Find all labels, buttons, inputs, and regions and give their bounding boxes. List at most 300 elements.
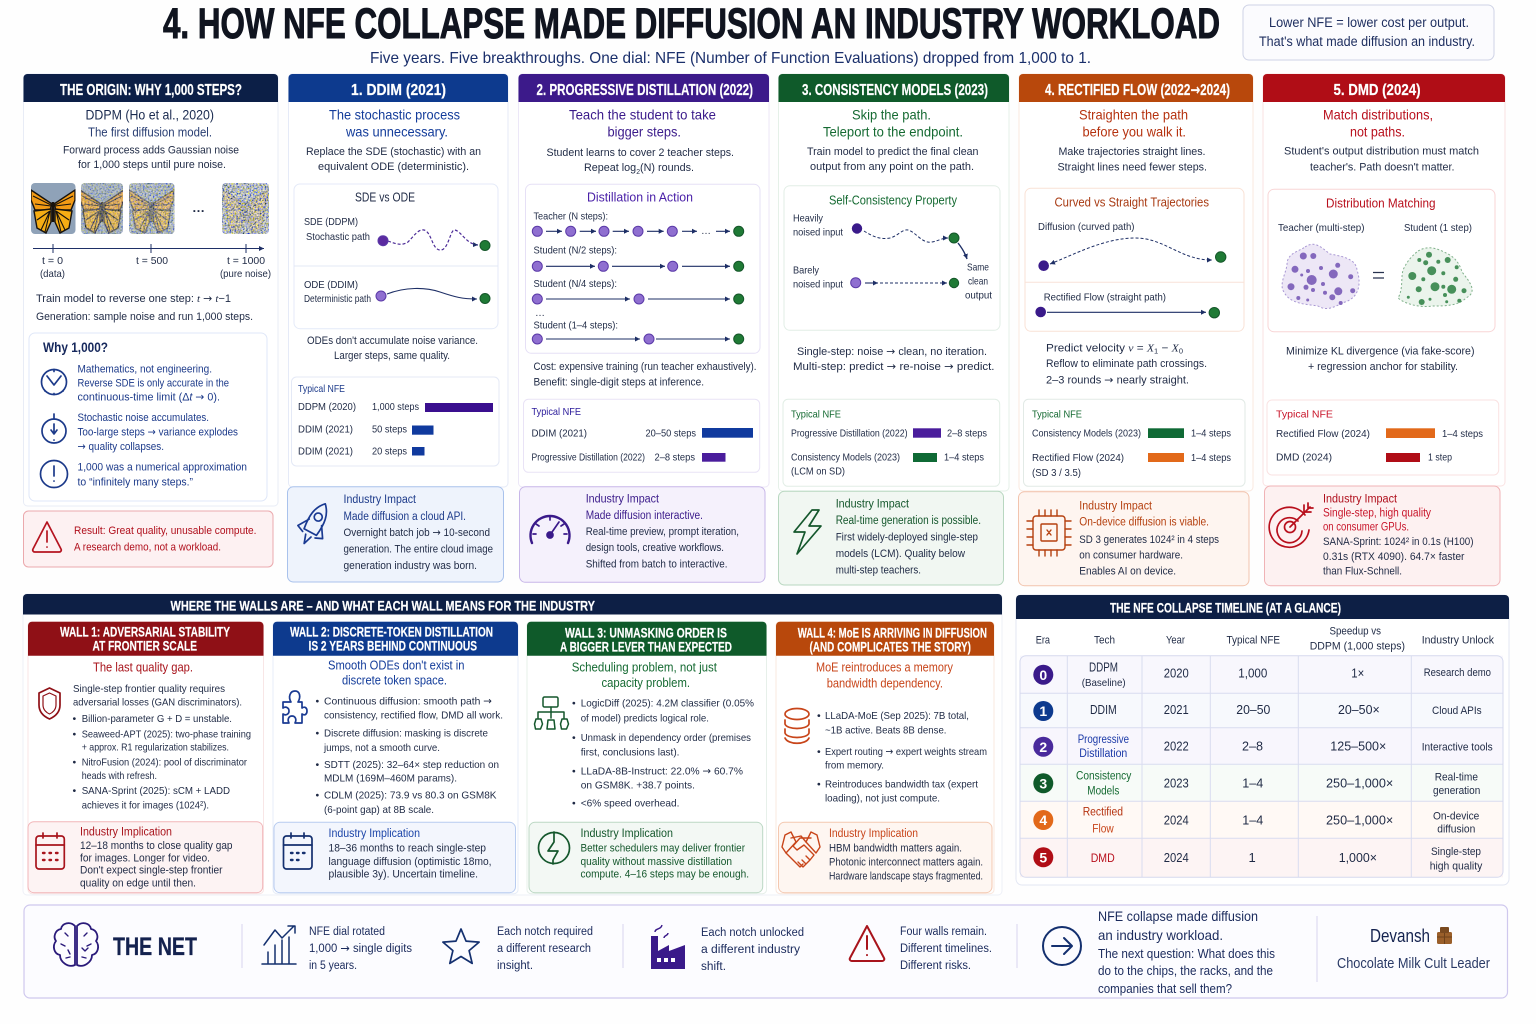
icon: rocket xyxy=(292,497,338,550)
reason 1 xyxy=(78,364,229,404)
table column headers: Speedup vs xyxy=(1330,625,1381,637)
row: era 1: 2021 xyxy=(1164,702,1189,717)
wall 4 body: ~1B active. Beats 8B dense. xyxy=(825,724,946,736)
wall 4 body: • xyxy=(817,710,821,722)
wall 1 implication: 12–18 months to close quality gap xyxy=(80,840,232,852)
diagram: SDE vs ODE: SDE (DDPM) xyxy=(304,216,358,228)
row: era 0: DDPM xyxy=(1089,661,1118,675)
the net heading: THE NET xyxy=(113,933,197,961)
chart: typical NFE CM xyxy=(783,399,1000,486)
callout: lower NFE: Lower NFE = lower cost per output. xyxy=(1269,15,1469,30)
industry impact: PD: Industry Impact xyxy=(586,494,660,506)
wall 4 body xyxy=(817,710,987,805)
wall 3 body: LogicDiff (2025): 4.2M classifier (0.05% xyxy=(581,698,754,710)
icon: chip xyxy=(1027,510,1071,556)
row: era 3: 2023 xyxy=(1164,775,1189,790)
wall 4 implication: HBM bandwidth matters again. xyxy=(829,843,962,855)
CM header xyxy=(778,74,1009,102)
chart: typical NFE DDIM: 50 steps xyxy=(372,424,407,436)
row: era 5: 2024 xyxy=(1164,850,1189,865)
industry impact: RF: on consumer hardware. xyxy=(1079,550,1183,562)
wall 3 body: Unmask in dependency order (premises xyxy=(581,732,751,744)
industry impact: CM xyxy=(778,491,1004,585)
wall 2 body: • xyxy=(316,789,320,801)
chart: typical NFE PD: Progressive Distillation (2022) xyxy=(532,452,645,464)
chart: typical NFE CM: 2–8 steps xyxy=(947,428,987,440)
net text 5: an industry workload. xyxy=(1098,927,1223,943)
diagram: SDE vs ODE xyxy=(294,184,498,329)
industry impact: DMD: Single-step, high quality xyxy=(1323,508,1431,520)
wall 2 body: SDTT (2025): 32–64× step reduction on xyxy=(324,759,499,771)
row: era 4: 4 xyxy=(1039,812,1047,828)
reason 2: Too-large steps → variance explodes xyxy=(78,426,238,439)
industry impact: DDIM: Made diffusion a cloud API. xyxy=(344,511,466,523)
training text xyxy=(36,292,253,323)
row: era 5: 5 xyxy=(1039,850,1047,866)
PD description: 2 xyxy=(636,169,640,176)
industry impact: DMD: SANA-Sprint: 1024² in 0.1s (H100) xyxy=(1323,536,1474,548)
wall 1 xyxy=(28,622,264,894)
wall 2 body: • xyxy=(316,759,320,771)
row: era 5: 1,000× xyxy=(1339,850,1377,865)
diagram: self-consistency: clean xyxy=(968,276,988,288)
RF formula: X xyxy=(1171,343,1180,355)
wall 3 body xyxy=(572,698,754,809)
diagram: curved vs straight: Rectified Flow (straight path) xyxy=(1044,292,1166,304)
industry impact: RF: SD 3 generates 1024² in 4 steps xyxy=(1079,534,1219,546)
icon: star xyxy=(443,929,479,963)
wall 1 body: NitroFusion (2024): pool of discriminator xyxy=(82,757,247,769)
chart: typical NFE RF xyxy=(1024,399,1245,486)
table column headers: Era xyxy=(1036,634,1051,646)
wall 1 header xyxy=(28,622,264,656)
row: era 0: 0 xyxy=(1039,667,1047,683)
wall 1 body: • xyxy=(72,785,76,797)
reason 3: 1,000 was a numerical approximation xyxy=(78,462,247,474)
DDIM note: Larger steps, same quality. xyxy=(334,350,450,362)
RF formula: 0 xyxy=(1179,349,1183,356)
row: era 3: generation xyxy=(1433,785,1480,797)
time axis: (pure noise) xyxy=(220,268,271,280)
chart: typical NFE DMD: DMD (2024) xyxy=(1276,452,1332,464)
row: era 2: 2 xyxy=(1039,739,1047,755)
origin intro text xyxy=(63,106,239,171)
diagram: distillation in action xyxy=(526,184,760,353)
section: walls xyxy=(23,594,1002,895)
wall 3 header: WALL 3: UNMASKING ORDER IS xyxy=(565,626,727,641)
icon: hierarchy xyxy=(534,697,568,729)
panel: rectified flow xyxy=(1018,74,1253,586)
wall 2 tagline: discrete token space. xyxy=(342,673,447,687)
row: era 2 xyxy=(1033,734,1493,760)
table column headers: DDPM (1,000 steps) xyxy=(1310,640,1405,652)
CM single and multi step xyxy=(793,345,995,373)
callout: lower NFE: That's what made diffusion an industry. xyxy=(1259,34,1475,49)
row: era 0: 2020 xyxy=(1164,665,1189,680)
chart: typical NFE RF: 1–4 steps xyxy=(1191,452,1231,464)
diagram: self-consistency: Barely xyxy=(793,265,820,277)
industry impact: DMD: than Flux-Schnell. xyxy=(1323,566,1402,578)
icon: target xyxy=(1269,503,1313,547)
wall 3 implication: compute. 4–16 steps may be enough. xyxy=(580,869,749,881)
RF description: Make trajectories straight lines. xyxy=(1058,146,1206,158)
chart: typical NFE DMD: 1 step xyxy=(1428,452,1452,464)
chart: typical NFE PD xyxy=(524,399,760,472)
chart: typical NFE DDIM: DDIM (2021) xyxy=(298,424,353,436)
box: why 1,000: Why 1,000? xyxy=(43,339,108,355)
training text: Generation: sample noise and run 1,000 steps. xyxy=(36,311,253,323)
industry impact: DDIM: Industry Impact xyxy=(344,494,417,506)
PD description: Student learns to cover 2 teacher steps. xyxy=(546,147,734,159)
PD cost and benefit: Cost: expensive training (run teacher exhaustively). xyxy=(534,361,756,373)
diagram: SDE vs ODE: Stochastic path xyxy=(306,231,370,243)
row: era 1: 20–50 xyxy=(1236,702,1270,717)
diagram: distillation in action: Distillation in Action xyxy=(587,191,693,205)
icon: brain xyxy=(54,923,98,966)
origin header: THE ORIGIN: WHY 1,000 STEPS? xyxy=(60,82,242,99)
wall 4 header xyxy=(776,622,994,656)
time axis: t = 0 xyxy=(42,255,63,267)
icon: rising chart xyxy=(262,926,296,964)
row: era 2: 2–8 xyxy=(1242,739,1263,754)
wall 2 body: jumps, not a smooth curve. xyxy=(323,742,440,754)
wall 4 tagline: MoE reintroduces a memory xyxy=(816,661,954,675)
net text 3: Each notch unlocked xyxy=(701,927,804,939)
net text 4: Different timelines. xyxy=(900,943,992,955)
wall 1 implication: for images. Longer for video. xyxy=(80,853,210,865)
icon: calendar blue xyxy=(284,833,312,869)
DMD tagline: Match distributions, xyxy=(1323,106,1433,122)
PD tagline: Teach the student to take xyxy=(569,106,716,122)
wall 3 tagline: Scheduling problem, not just xyxy=(572,661,717,675)
wall 3 header xyxy=(527,622,766,656)
diagram: curved vs straight: Curved vs Straight Trajectories xyxy=(1054,196,1209,210)
wall 4 body: • xyxy=(817,778,821,790)
callout: result: A research demo, not a workload. xyxy=(74,542,221,554)
diagram: SDE vs ODE: ODE (DDIM) xyxy=(304,279,358,291)
CM single and multi step: Single-step: noise → clean, no iteration. xyxy=(797,345,987,358)
wall 1 body: Single-step frontier quality requires xyxy=(73,683,225,695)
wall 1 body: achieves it for images (1024²). xyxy=(82,799,209,811)
wall 4 header: (AND COMPLICATES THE STORY) xyxy=(810,640,971,655)
DMD tagline xyxy=(1323,106,1433,140)
icon: exclamation xyxy=(40,460,68,488)
table column headers: Industry Unlock xyxy=(1422,634,1494,646)
icon: layers xyxy=(785,708,809,743)
row: era 4: Flow xyxy=(1092,823,1114,835)
chart: typical NFE PD: 20–50 steps xyxy=(646,427,696,439)
chart: typical NFE PD: 2–8 steps xyxy=(654,452,695,464)
table column headers xyxy=(1036,625,1494,652)
row: era 3: 1–4 xyxy=(1242,775,1263,790)
icon: arrow circle xyxy=(1043,927,1081,965)
chart: typical NFE DMD xyxy=(1267,400,1499,475)
wall 2 header: IS 2 YEARS BEHIND CONTINUOUS xyxy=(308,639,477,654)
row: era 1: DDIM xyxy=(1090,703,1117,717)
RF formula xyxy=(1046,343,1207,386)
row: era 5: 1 xyxy=(1248,850,1256,865)
industry impact: CM: Real-time generation is possible. xyxy=(836,515,981,527)
wall 1 body xyxy=(72,683,251,811)
industry impact: PD: design tools, creative workflows. xyxy=(586,542,724,554)
diagram: distribution matching: Student (1 step) xyxy=(1404,222,1472,234)
callout: lower NFE xyxy=(1243,5,1494,60)
CM description xyxy=(807,146,978,173)
wall 4 tagline: bandwidth dependency. xyxy=(827,677,943,691)
icon: gauge xyxy=(530,516,570,543)
table column headers: Typical NFE xyxy=(1226,634,1280,646)
RF description xyxy=(1058,146,1207,174)
industry impact: PD xyxy=(520,487,765,582)
row: era 4: 1–4 xyxy=(1242,812,1263,827)
DMD note: + regression anchor for stability. xyxy=(1308,361,1458,373)
net text 3 xyxy=(701,927,804,973)
chart: typical NFE PD: Typical NFE xyxy=(532,406,581,418)
reason 1: continuous-time limit (Δt → 0). xyxy=(78,391,220,404)
wall 2 header: WALL 2: DISCRETE-TOKEN DISTILLATION xyxy=(290,625,493,640)
PD description: (N) rounds. xyxy=(640,162,694,174)
wall 3 body: <6% speed overhead. xyxy=(581,797,680,809)
butterfly noising sequence xyxy=(28,181,270,235)
wall 3 implication: Better schedulers may deliver frontier xyxy=(580,843,745,855)
row: era 5: Single-step xyxy=(1431,846,1481,858)
industry impact: PD: Shifted from batch to interactive. xyxy=(586,558,728,570)
industry impact: DMD: Industry Impact xyxy=(1323,494,1398,506)
wall 1 body: + approx. R1 regularization stabilizes. xyxy=(82,742,229,754)
origin header xyxy=(24,74,278,102)
wall 3 tagline xyxy=(572,661,717,690)
chart: typical NFE RF: Typical NFE xyxy=(1032,409,1082,421)
wall 2 body: CDLM (2025): 73.9 vs 80.3 on GSM8K xyxy=(324,789,496,801)
reason 2: Stochastic noise accumulates. xyxy=(78,412,209,424)
PD tagline: bigger steps. xyxy=(608,124,681,140)
icon: factory xyxy=(651,925,685,969)
row: era 3: 3 xyxy=(1039,776,1047,792)
CM tagline: Skip the path. xyxy=(852,106,931,122)
row: era 0: (Baseline) xyxy=(1082,677,1126,689)
row: era 5 xyxy=(1033,846,1483,872)
diagram: self-consistency: output xyxy=(965,290,992,302)
row: era 4: Rectified xyxy=(1083,807,1123,819)
chart: typical NFE RF: (SD 3 / 3.5) xyxy=(1032,468,1081,479)
row: era 4: diffusion xyxy=(1437,824,1475,836)
panel: NFE timeline table xyxy=(1016,595,1509,885)
net text 4: Four walls remain. xyxy=(900,926,987,938)
origin intro text: for 1,000 steps until pure noise. xyxy=(78,159,226,171)
DDIM tagline: The stochastic process xyxy=(329,106,460,122)
wall 2 body xyxy=(316,696,503,816)
industry impact: RF xyxy=(1018,492,1249,586)
net text 4: Different risks. xyxy=(900,960,971,972)
chart: typical NFE CM: Progressive Distillation (2022) xyxy=(791,429,908,440)
chart: typical NFE DDIM: 1,000 steps xyxy=(372,401,419,413)
row: era 0: Research demo xyxy=(1424,667,1491,679)
net text 1 xyxy=(309,926,412,972)
PD cost and benefit: Benefit: single-digit steps at inference. xyxy=(534,377,704,389)
net text 1: 1,000 → single digits xyxy=(309,941,412,955)
icon: warning triangle xyxy=(850,926,884,961)
RF tagline: Straighten the path xyxy=(1079,106,1188,122)
DMD note xyxy=(1286,345,1474,373)
callout: result: Result: Great quality, unusable compute. xyxy=(74,525,256,537)
wall 3 tagline: capacity problem. xyxy=(602,676,690,690)
chart: typical NFE DDIM: DDIM (2021) xyxy=(298,446,353,458)
diagram: distillation in action: … xyxy=(701,226,711,237)
icon: handshake xyxy=(782,832,820,867)
wall 4 tagline xyxy=(816,661,954,691)
row: era 0: 1,000 xyxy=(1238,665,1267,680)
net text 5: NFE collapse made diffusion xyxy=(1098,908,1258,924)
wall 2 implication: plausible 3y). Uncertain timeline. xyxy=(328,869,478,881)
wall 4 body: • xyxy=(817,746,821,758)
diagram: self-consistency: noised input xyxy=(793,279,843,291)
diagram: distillation in action: Student (N/4 steps): xyxy=(534,278,617,290)
chart: typical NFE RF: 1–4 steps xyxy=(1191,428,1231,440)
diagram: self-consistency: Same xyxy=(967,262,989,274)
PD header: 2. PROGRESSIVE DISTILLATION (2022) xyxy=(536,82,753,99)
wall 4 body: from memory. xyxy=(825,760,884,772)
icon: puzzle xyxy=(283,691,307,723)
wall 3 implication: Industry Implication xyxy=(580,828,673,840)
PD cost and benefit xyxy=(534,361,756,389)
wall 2 implication: language diffusion (optimistic 18mo, xyxy=(328,856,492,868)
row: era 3: Consistency xyxy=(1076,770,1132,782)
wall 1 header: WALL 1: ADVERSARIAL STABILITY xyxy=(60,625,230,640)
chart: typical NFE DDIM: Typical NFE xyxy=(298,383,345,395)
row: era 0: 1× xyxy=(1351,665,1364,680)
timeline header: THE NFE COLLAPSE TIMELINE (AT A GLANCE) xyxy=(1110,601,1341,616)
industry impact: DDIM: Overnight batch job → 10-second xyxy=(344,526,490,539)
net text 3: a different industry xyxy=(701,944,800,956)
author: Devansh xyxy=(1370,926,1430,946)
wall 3 xyxy=(527,622,766,894)
industry impact: DMD: 0.31s (RTX 4090). 64.7× faster xyxy=(1323,551,1465,563)
reason 2: → quality collapses. xyxy=(78,440,164,453)
wall 4 implication xyxy=(778,822,992,893)
net text 1: in 5 years. xyxy=(309,960,357,972)
wall 2 implication: 18–36 months to reach single-step xyxy=(328,843,486,855)
icon: chocolate milk xyxy=(1437,927,1452,944)
wall 2 body: • xyxy=(316,728,320,740)
wall 2 xyxy=(273,622,518,894)
icon: lightning bolt xyxy=(794,510,821,554)
row: era 2: Interactive tools xyxy=(1422,742,1493,754)
net text 5: do to the chips, the racks, and the xyxy=(1098,964,1273,978)
net text 2 xyxy=(497,926,593,972)
row: era 2: 125–500× xyxy=(1330,739,1386,754)
RF header: 4. RECTIFIED FLOW (2022→2024) xyxy=(1045,81,1230,99)
wall 2 body: Continuous diffusion: smooth path → xyxy=(324,696,492,708)
PD header xyxy=(518,74,769,102)
CM tagline: Teleport to the endpoint. xyxy=(823,124,963,140)
wall 3 body: on GSM8K. +38.7 points. xyxy=(581,780,695,792)
industry impact: CM: Industry Impact xyxy=(836,499,910,511)
RF formula: 2–3 rounds → nearly straight. xyxy=(1046,373,1189,386)
diagram: curved vs straight xyxy=(1025,188,1244,331)
diagram: self-consistency xyxy=(784,186,1000,330)
RF tagline: before you walk it. xyxy=(1082,124,1186,140)
net text 3: shift. xyxy=(701,961,726,973)
industry impact: DDIM xyxy=(288,487,504,582)
reason 1: Reverse SDE is only accurate in the xyxy=(78,378,229,390)
industry impact: RF: On-device diffusion is viable. xyxy=(1079,517,1209,529)
RF description: Straight lines need fewer steps. xyxy=(1058,162,1207,174)
icon: clock xyxy=(42,370,66,394)
row: era 5: high quality xyxy=(1430,860,1483,872)
wall 1 body: • xyxy=(72,728,76,740)
CM description: output from any point on the path. xyxy=(810,161,974,173)
panel: consistency models xyxy=(778,74,1009,585)
RF header xyxy=(1019,74,1253,102)
row: era 1: 1 xyxy=(1039,703,1047,719)
wall 1 body: • xyxy=(72,757,76,769)
wall 1 implication: Don't expect single-step frontier xyxy=(80,865,223,877)
icon: shield xyxy=(39,688,60,719)
net text 2: Each notch required xyxy=(497,926,593,938)
timeline header xyxy=(1016,595,1509,619)
CM description: Train model to predict the final clean xyxy=(807,146,978,158)
chart: typical NFE CM: (LCM on SD) xyxy=(791,466,845,477)
panel: DDIM xyxy=(288,74,508,582)
reason 1: Mathematics, not engineering. xyxy=(78,364,212,376)
wall 2 tagline: Smooth ODEs don't exist in xyxy=(328,658,465,672)
row: era 2: Distillation xyxy=(1079,748,1127,760)
row: era 3: Real-time xyxy=(1435,771,1478,783)
net text 4 xyxy=(900,926,992,972)
wall 1 tagline: The last quality gap. xyxy=(93,661,193,675)
diagram: distillation in action: Student (N/2 steps): xyxy=(534,244,617,256)
row: era 2: 2022 xyxy=(1164,739,1189,754)
DDIM header xyxy=(288,74,508,102)
reason 2 xyxy=(78,412,238,453)
icon: clock bolt xyxy=(538,832,570,864)
wall 3 header: A BIGGER LEVER THAN EXPECTED xyxy=(560,640,732,655)
net text 2: a different research xyxy=(497,943,591,955)
wall 2 body: (6-point gap) at 8B scale. xyxy=(324,804,434,816)
wall 1 implication: Industry Implication xyxy=(80,826,172,838)
wall 3 body: • xyxy=(572,765,576,777)
training text: Train model to reverse one step: t → t−1 xyxy=(36,292,231,305)
chart: typical NFE CM: Typical NFE xyxy=(791,409,841,421)
diagram: distillation in action: Student (1–4 steps): xyxy=(534,319,618,331)
wall 4 implication: Photonic interconnect matters again. xyxy=(829,857,983,869)
wall 1 header: AT FRONTIER SCALE xyxy=(92,639,197,654)
wall 1 body: adversarial losses (GAN discriminators). xyxy=(73,696,242,708)
reason 3: to “infinitely many steps.” xyxy=(78,477,193,489)
author: Chocolate Milk Cult Leader xyxy=(1337,956,1490,972)
wall 1 implication xyxy=(28,822,263,893)
net text 5 xyxy=(1098,908,1275,996)
chart: typical NFE DMD: Rectified Flow (2024) xyxy=(1276,428,1370,440)
origin intro text: Forward process adds Gaussian noise xyxy=(63,144,239,156)
RF tagline xyxy=(1079,106,1188,140)
wall 4 header: WALL 4: MoE IS ARRIVING IN DIFFUSION xyxy=(798,626,987,641)
origin intro text: The first diffusion model. xyxy=(88,126,212,140)
row: era 4: 250–1,000× xyxy=(1326,812,1393,827)
row: era 1 xyxy=(1033,701,1482,721)
PD description: Repeat log xyxy=(584,162,637,174)
net text 5: The next question: What does this xyxy=(1098,947,1275,961)
wall 2 tagline xyxy=(328,658,465,687)
wall 2 header xyxy=(273,622,518,656)
DDIM description xyxy=(306,146,481,173)
DDIM tagline xyxy=(329,106,460,140)
row: era 3 xyxy=(1033,770,1480,797)
wall 3 body: • xyxy=(572,732,576,744)
panel: DMD xyxy=(1263,74,1505,586)
CM header: 3. CONSISTENCY MODELS (2023) xyxy=(802,82,988,99)
butterfly noising sequence: … xyxy=(192,200,205,215)
